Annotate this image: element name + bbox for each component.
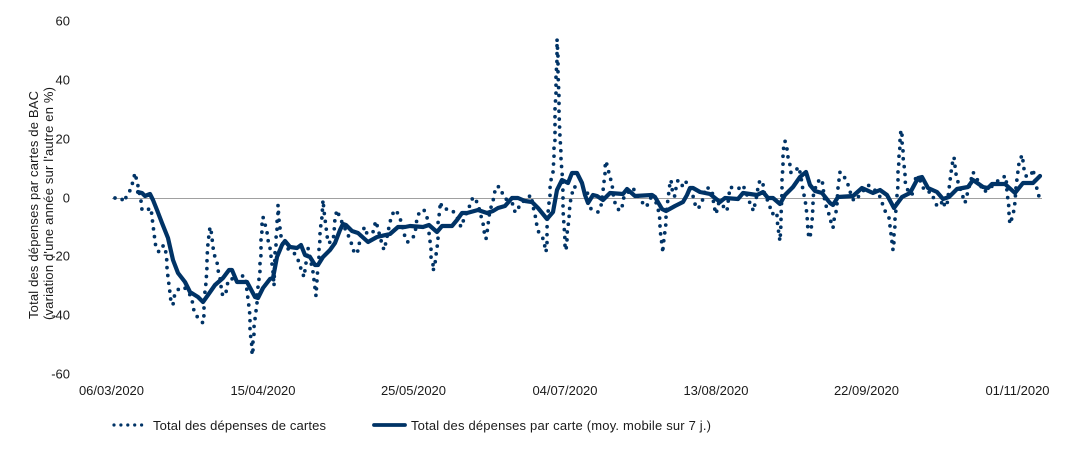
x axis tick labels: 06/03/2020 — [79, 383, 144, 398]
solid series: 7-day moving average — [138, 172, 1040, 302]
x axis tick labels: 04/07/2020 — [532, 383, 598, 398]
legend — [114, 418, 711, 433]
y axis tick labels: 40 — [56, 72, 70, 88]
y axis tick labels: 20 — [56, 132, 70, 146]
y axis tick labels — [51, 14, 70, 382]
x axis tick labels: 13/08/2020 — [683, 383, 749, 398]
dotted series: total card spending — [115, 39, 1040, 355]
legend entry: dotted series: Total des dépenses de cartes — [153, 418, 326, 433]
x axis tick labels: 25/05/2020 — [381, 383, 446, 398]
y axis tick labels: -20 — [51, 248, 70, 264]
y axis tick labels: -40 — [51, 308, 70, 322]
y axis tick labels: 60 — [56, 14, 70, 28]
x axis tick labels: 22/09/2020 — [834, 383, 899, 398]
x axis tick labels: 01/11/2020 — [985, 383, 1050, 398]
legend entry: moving average series: Total des dépenses par carte (moy. mobile sur 7 j.) — [411, 418, 711, 433]
y axis title: Total des dépenses par cartes de BAC — [26, 91, 41, 319]
x axis tick labels: 15/04/2020 — [230, 383, 296, 398]
y axis title: (variation d'une année sur l'autre en %) — [41, 87, 56, 320]
y axis tick labels: 0 — [63, 190, 70, 206]
y axis title — [26, 87, 56, 320]
y axis tick labels: -60 — [51, 366, 70, 382]
x axis tick labels — [79, 383, 1050, 398]
